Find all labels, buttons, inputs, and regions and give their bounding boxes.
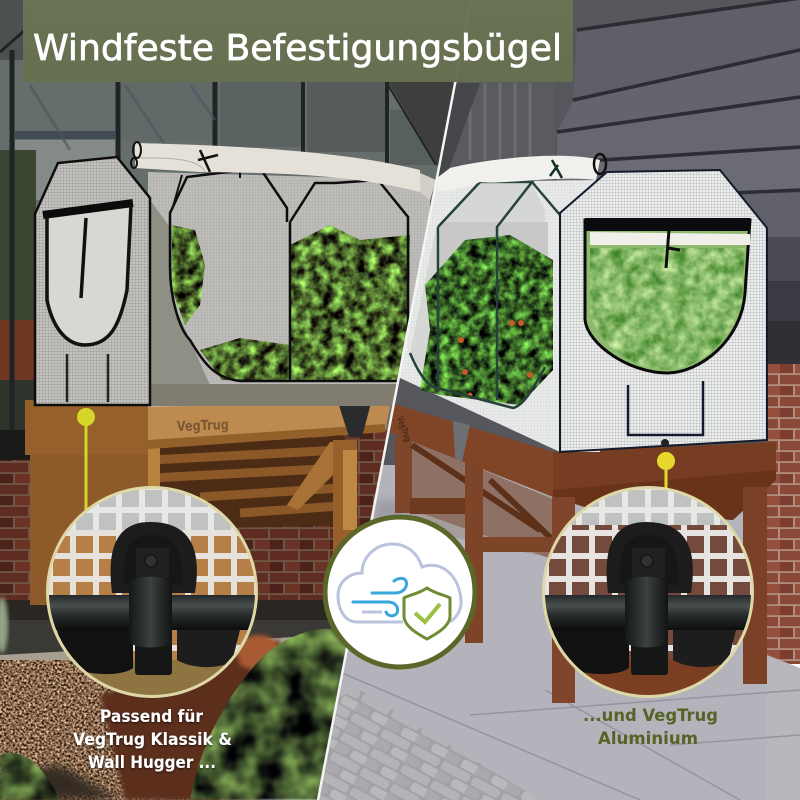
tent, left <box>35 142 436 407</box>
pointer: right <box>657 452 675 492</box>
planter logo: VegTrug <box>394 416 412 443</box>
plant foliage, left <box>290 225 410 382</box>
detail circle: bracket on VegTrug Klassik <box>46 486 258 698</box>
front window <box>585 220 750 373</box>
plant foliage, right <box>420 235 553 405</box>
caption: left <box>73 707 232 773</box>
siding wall <box>383 0 800 465</box>
photo: VegTrug Aluminium on terrace <box>300 0 800 800</box>
icon: shield with check <box>404 588 450 639</box>
caption: right: ...und VegTrug <box>583 706 718 726</box>
detail circle: bracket on VegTrug Aluminium <box>542 486 754 698</box>
greenhouse background <box>0 0 454 430</box>
icon: cloud <box>338 544 461 622</box>
blurred foliage <box>190 628 346 800</box>
title: Windfeste Befestigungsbügel <box>33 28 562 69</box>
diagonal divider <box>318 0 471 800</box>
pocket <box>628 381 703 435</box>
tent, right <box>400 154 767 452</box>
caption: right <box>583 706 718 749</box>
caption: right: Aluminium <box>598 729 698 749</box>
pointer: left <box>77 408 95 512</box>
black bracket <box>339 406 370 437</box>
gravel <box>0 660 220 800</box>
pocket <box>67 354 108 402</box>
caption: left: Wall Hugger ... <box>88 753 216 773</box>
brick wall and ground <box>0 430 388 800</box>
icon badge: wind protection <box>325 517 475 667</box>
brick wall <box>766 364 800 664</box>
icon: wind grey line <box>362 610 382 614</box>
title banner <box>23 0 573 82</box>
window frames <box>170 168 408 381</box>
caption: left: Passend für <box>100 707 204 727</box>
caption: left: VegTrug Klassik & <box>73 730 232 750</box>
rolled cover <box>135 143 420 192</box>
photo: VegTrug Klassik with greenhouse <box>0 0 480 800</box>
end panel <box>560 170 767 452</box>
metal bracket <box>453 421 470 462</box>
icon: wind <box>353 578 407 616</box>
terracotta pot <box>100 640 280 800</box>
window frames <box>410 182 560 408</box>
rolled cover <box>437 156 600 191</box>
end panel <box>35 157 150 405</box>
pavement <box>319 465 800 800</box>
planter logo: VegTrug <box>177 417 229 435</box>
wooden planter, left <box>25 397 392 605</box>
wooden planter, right <box>388 402 776 703</box>
